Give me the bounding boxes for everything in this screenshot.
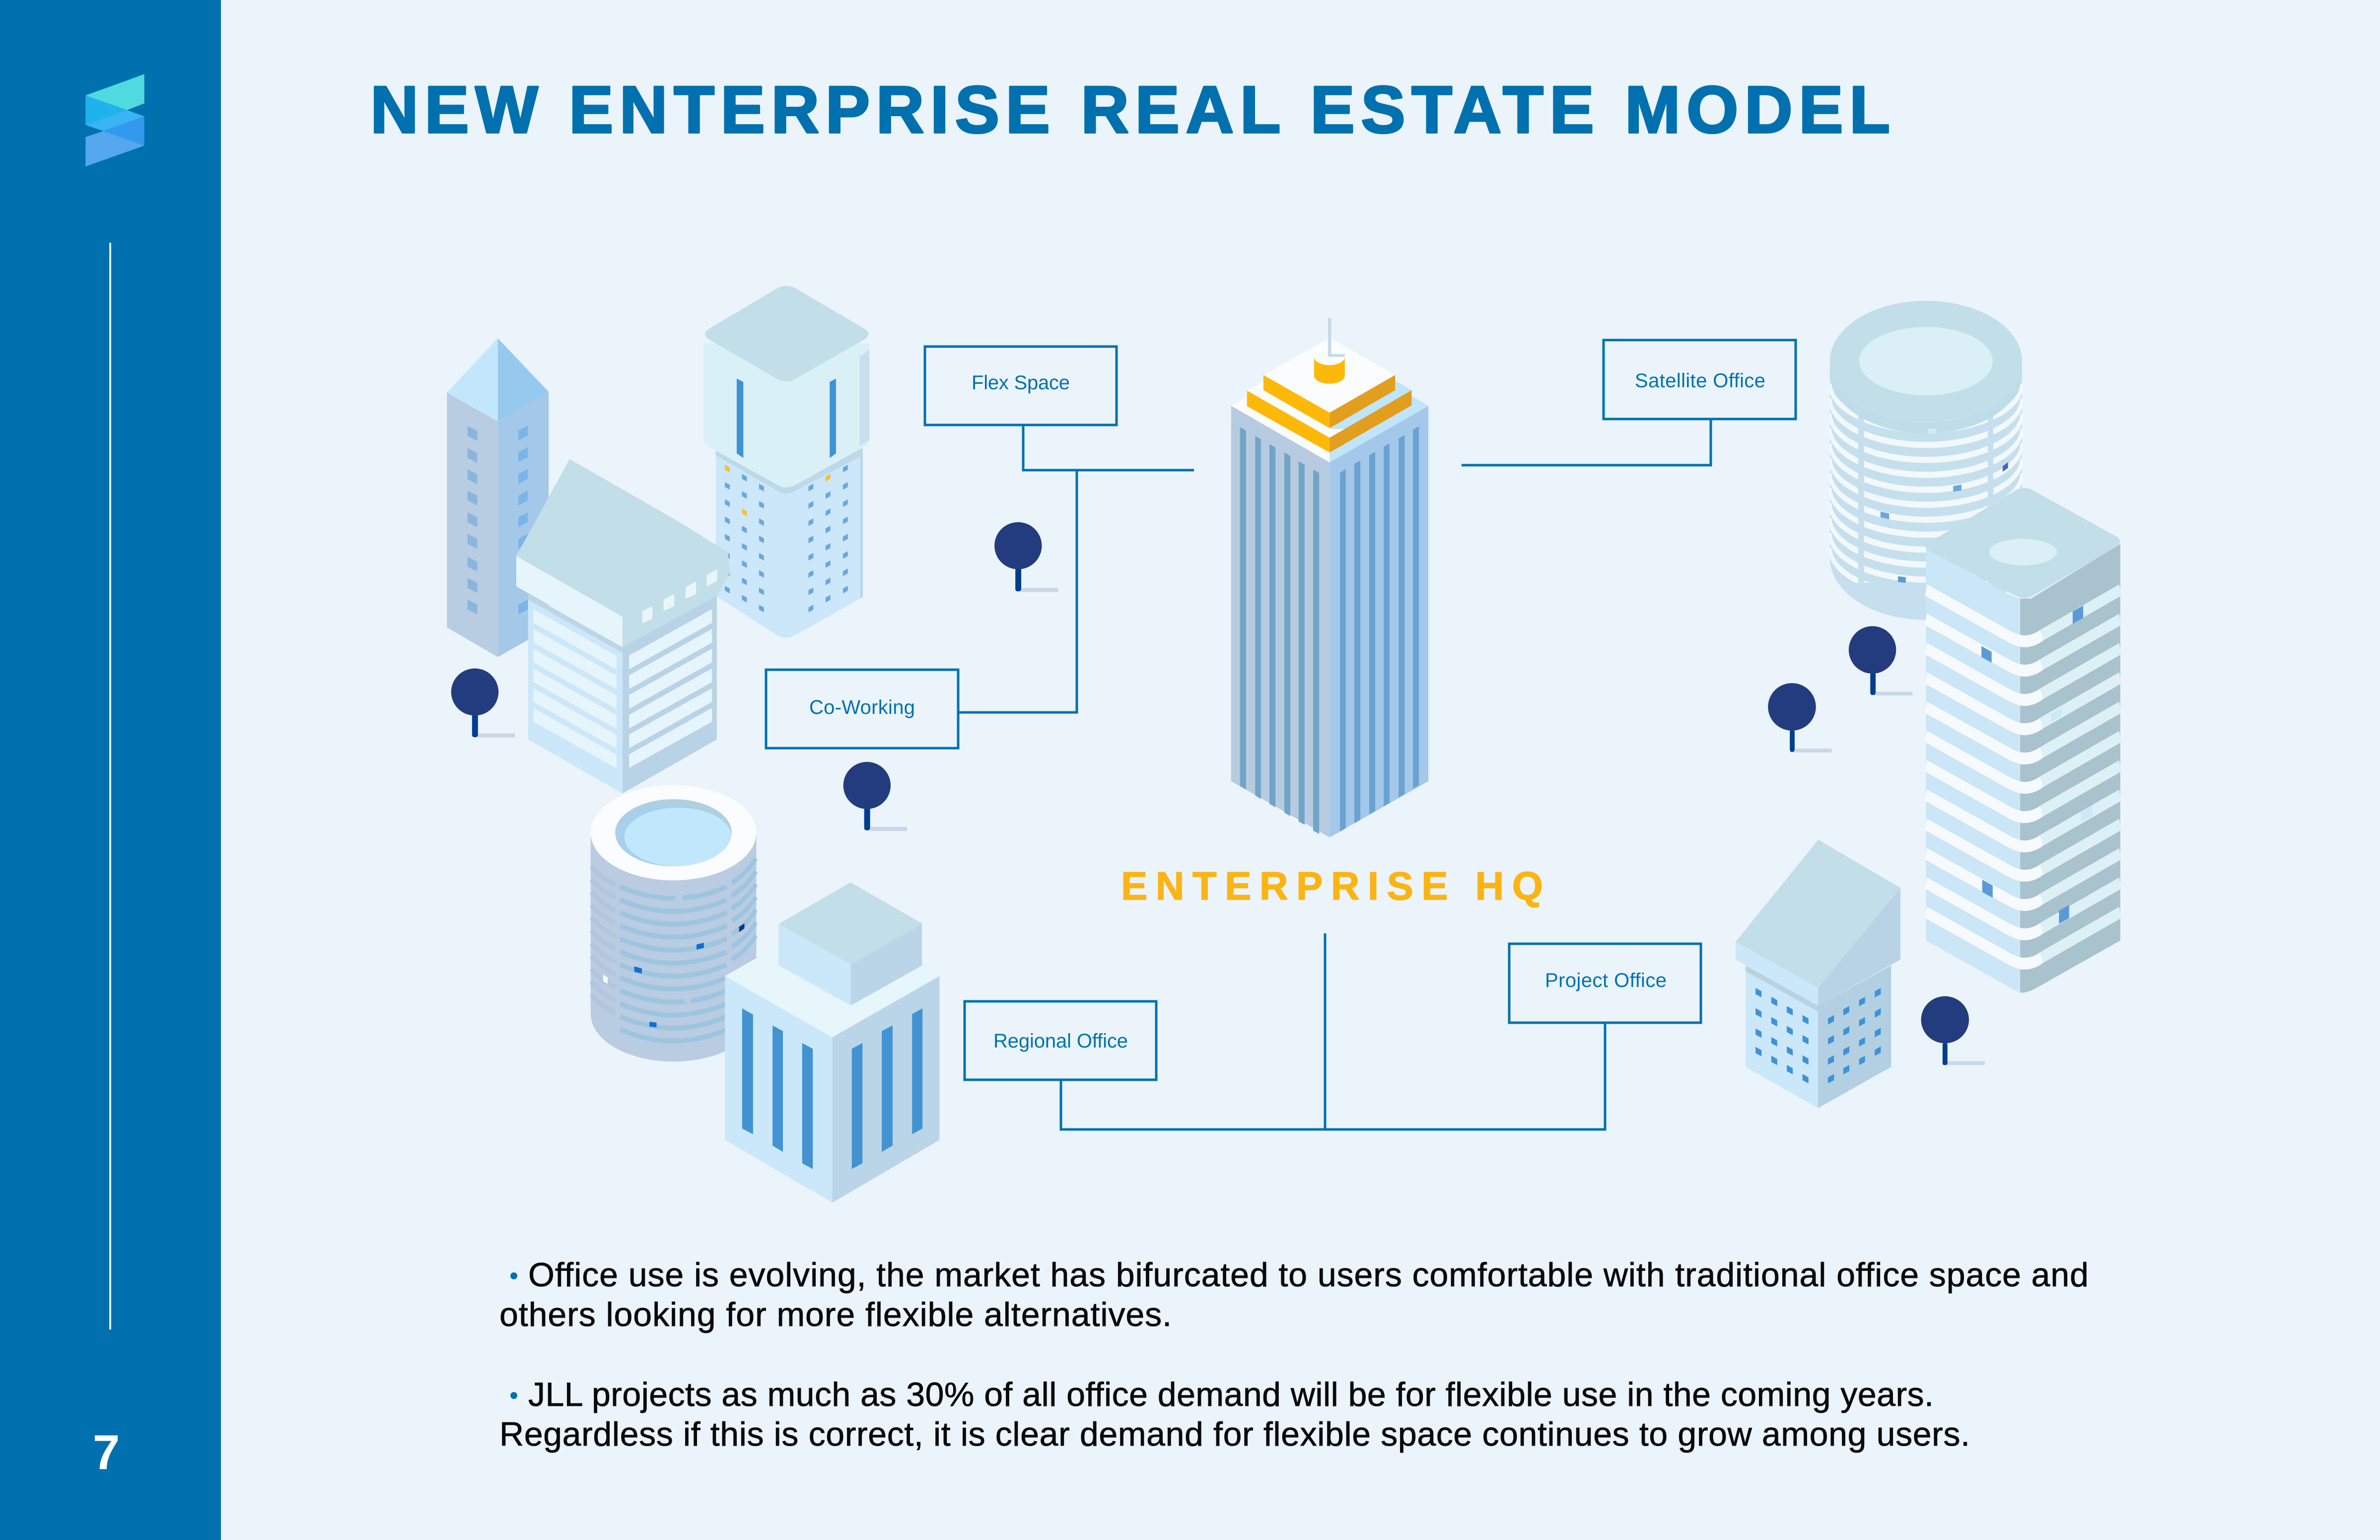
label box: co-working: Co-Working xyxy=(809,697,915,718)
heading: enterprise HQ: ENTERPRISE HQ xyxy=(1121,864,1543,908)
icon: company logo xyxy=(85,74,144,166)
building: striped block with sloped roof xyxy=(516,459,730,793)
label box: regional office xyxy=(965,1001,1156,1080)
text block: body copy: others looking for more flexible alternatives. xyxy=(499,1296,1172,1333)
connector lines xyxy=(959,420,1711,1129)
buildings: upper left group xyxy=(447,286,1058,831)
buildings: lower right group xyxy=(1736,840,1985,1108)
label box: flex space: Flex Space xyxy=(972,372,1070,394)
label box: flex space xyxy=(925,347,1117,425)
buildings: upper right group xyxy=(1768,301,2120,993)
building: round tower xyxy=(591,785,756,1061)
label box: project office xyxy=(1509,944,1701,1023)
label box: regional office: Regional Office xyxy=(993,1030,1128,1052)
building: capped tower xyxy=(703,286,869,637)
building: block with blue fins xyxy=(725,882,939,1202)
buildings: lower left group xyxy=(591,785,939,1202)
tree: under flex space xyxy=(994,522,1058,592)
text block: body copy: Regardless if this is correct, it is clear demand for flexible space continues to grow among users. xyxy=(499,1415,1970,1453)
tree: left xyxy=(451,668,515,738)
building: enterprise HQ tower xyxy=(1231,318,1428,838)
text block: body copy: JLL projects as much as 30% of all office demand will be for flexible use in the coming years. xyxy=(528,1376,1934,1413)
label box: satellite office: Satellite Office xyxy=(1635,370,1765,392)
building: tall striped tower xyxy=(1926,488,2120,993)
building: pointed tower xyxy=(447,338,549,657)
text block: body copy: Office use is evolving, the market has bifurcated to users comfortable with traditional office space and xyxy=(528,1256,2089,1294)
label box: project office: Project Office xyxy=(1545,970,1667,991)
tree: under co-working xyxy=(843,762,907,831)
tree: near round tower xyxy=(1849,626,1912,696)
building: small house with windows xyxy=(1736,840,1900,1108)
text block: body copy xyxy=(499,1256,2089,1453)
panel: blue sidebar xyxy=(0,0,221,1540)
tree: left of round tower xyxy=(1768,683,1832,753)
page number: 7 xyxy=(93,1425,120,1479)
title: NEW ENTERPRISE REAL ESTATE MODEL xyxy=(370,73,1890,147)
tree: lower right xyxy=(1921,996,1985,1065)
label box: satellite office xyxy=(1604,340,1796,419)
label box: co-working xyxy=(766,670,958,748)
building: round striped tower xyxy=(1830,301,2022,620)
